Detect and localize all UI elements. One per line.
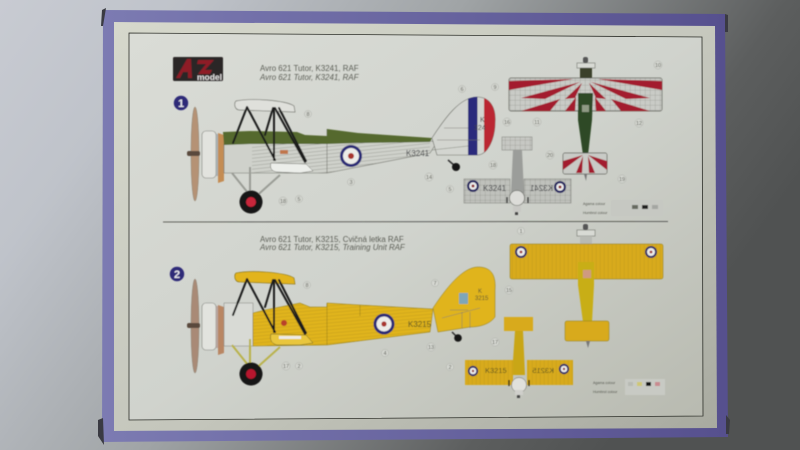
box with lavender border <box>98 8 730 445</box>
engine cowl <box>202 303 253 355</box>
badge: number 2 <box>170 267 184 281</box>
tail fin and rudder: 324 <box>474 125 486 132</box>
callout numbers: 20 <box>547 153 553 159</box>
callout numbers: 5 <box>448 187 452 193</box>
callout numbers: 1 <box>519 229 523 235</box>
roundel <box>340 145 362 167</box>
fuselage green decking <box>223 129 432 145</box>
callout numbers: 4 <box>383 351 387 357</box>
callout numbers: 5 <box>297 197 301 203</box>
fin marks <box>442 289 489 328</box>
red maple detail <box>280 150 288 154</box>
serial left: K3215 <box>485 366 507 375</box>
tailplane <box>565 321 609 348</box>
callout numbers: 3 <box>349 180 353 186</box>
heading: aircraft 2: Avro 621 Tutor, K3215, Cvičná letka RAF <box>260 235 404 244</box>
engine <box>510 190 524 206</box>
engine <box>577 57 595 78</box>
callout numbers <box>279 61 662 371</box>
callout numbers: 12 <box>636 121 642 127</box>
colour key aircraft 1: Humbrol colour <box>583 211 608 215</box>
engine cowl <box>202 131 224 183</box>
callout numbers: 18 <box>280 199 286 205</box>
tail wheel <box>452 332 462 342</box>
tail fin <box>433 267 495 332</box>
aircraft 1 top view <box>509 57 662 181</box>
colour key aircraft 2 <box>593 379 665 395</box>
callout numbers: 6 <box>460 87 464 93</box>
red star detail <box>281 320 287 326</box>
wing struts <box>233 279 306 334</box>
red wing rays left <box>509 79 582 111</box>
colour key aircraft 1: Agama colour <box>583 202 606 206</box>
fuselage yellow <box>253 303 433 346</box>
colour key aircraft 2: Agama colour <box>593 381 616 385</box>
callout numbers: 11 <box>534 120 540 126</box>
propeller <box>187 107 200 201</box>
upper wing <box>510 244 663 279</box>
serial number: K3241 <box>406 149 430 158</box>
upper wing <box>235 100 295 112</box>
aircraft 1 side view <box>187 90 498 214</box>
aircraft 1 underside view <box>464 137 571 215</box>
tail fin and rudder: K <box>480 117 485 124</box>
aircraft 2 top view <box>510 224 663 348</box>
wing struts <box>233 107 306 162</box>
lower wing <box>271 334 313 345</box>
roundel <box>374 314 394 334</box>
callout numbers: 9 <box>493 85 497 91</box>
serial right mirrored: K3215 <box>532 366 554 375</box>
callout numbers: 18 <box>490 163 496 169</box>
aircraft 2 side view <box>187 267 495 386</box>
heading: aircraft 2: Avro 621 Tutor, K3215, Training Unit RAF <box>259 243 406 252</box>
callout numbers: 16 <box>504 120 510 126</box>
badge: number 1 <box>174 96 188 110</box>
engine <box>512 378 526 392</box>
aircraft 2 underside view <box>465 317 573 398</box>
colour key aircraft 1 <box>583 200 663 216</box>
fin marks: K <box>478 289 482 295</box>
colour key aircraft 2: Humbrol colour <box>593 390 618 394</box>
callout numbers: 8 <box>306 112 310 118</box>
badge: number 2: 2 <box>174 269 180 281</box>
callout numbers: 17 <box>492 340 498 346</box>
serial number: K3215 <box>408 320 432 329</box>
engine <box>577 224 595 244</box>
fin marks: 3215 <box>475 296 489 302</box>
upper wing <box>235 272 295 284</box>
roundels <box>515 246 657 258</box>
heading: aircraft 1: Avro 621 Tutor, K3241, RAF <box>259 73 360 82</box>
logo <box>173 57 223 82</box>
fuselage <box>578 262 594 322</box>
landing gear <box>232 167 280 214</box>
tailplane <box>563 153 607 181</box>
landing gear <box>232 339 280 386</box>
callout numbers: 2 <box>297 364 301 370</box>
serial right mirrored: K3241 <box>529 184 553 193</box>
callout numbers: 19 <box>619 177 625 183</box>
callout numbers: 14 <box>426 175 432 181</box>
callout numbers: 8 <box>305 283 309 289</box>
serial left: K3241 <box>483 184 507 193</box>
heading: aircraft 1: Avro 621 Tutor, K3241, RAF <box>260 64 359 73</box>
callout numbers: 7 <box>433 281 437 287</box>
callout numbers: 15 <box>506 288 512 294</box>
callout numbers: 13 <box>428 345 434 351</box>
red wing rays right <box>589 79 662 111</box>
upper wing <box>509 78 662 111</box>
callout numbers: 2 <box>448 365 452 371</box>
callout numbers: 10 <box>655 63 661 69</box>
tail wheel <box>448 160 460 171</box>
tail fin and rudder <box>431 96 496 156</box>
logo: model <box>197 72 222 82</box>
divider <box>163 220 668 223</box>
badge: number 1: 1 <box>178 98 184 110</box>
fuselage silver <box>224 129 437 173</box>
callout numbers: 17 <box>283 364 289 370</box>
fuselage <box>578 93 593 155</box>
propeller <box>187 279 200 373</box>
heading: aircraft 2 <box>259 235 406 252</box>
heading: aircraft 1 <box>259 64 360 82</box>
lower wing <box>271 163 313 173</box>
